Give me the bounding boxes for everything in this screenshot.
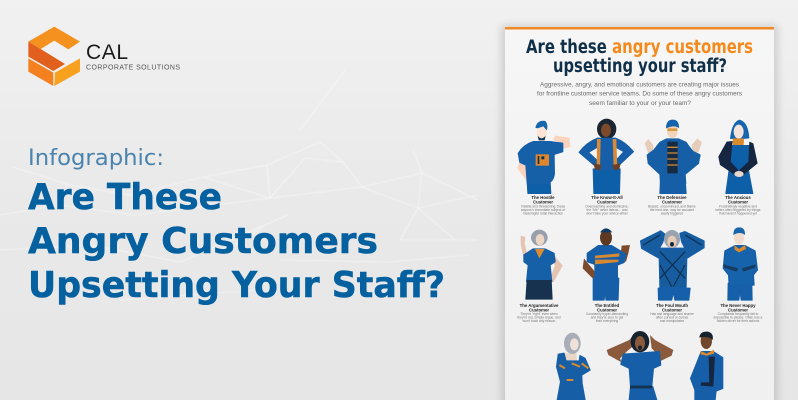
caption: argumentative customer: The Argumentative: [520, 303, 559, 308]
panel top accent: [505, 27, 774, 30]
caption: argumentative customer: [517, 303, 561, 323]
figure: bottom centre customer: [607, 331, 673, 400]
caption: know-it-all customer: won't take your advice either: [586, 212, 629, 216]
panel intro text: Aggressive, angry, and emotional customers are creating major issues: [540, 82, 739, 88]
figure: argumentative customer: [521, 230, 563, 300]
panel intro text: [537, 82, 742, 107]
caption: argumentative customer: Customer: [529, 308, 549, 312]
caption: anxious customer: The Anxious: [725, 195, 751, 200]
caption: hostile customer: Volatile and threatening, these: [521, 204, 565, 208]
caption: foul mouth customer: Has lost language and shame: [650, 312, 694, 316]
panel title: [526, 37, 753, 77]
logo: [28, 27, 180, 86]
caption: hostile customer: Customer: [533, 200, 553, 204]
figure: anxious customer: [718, 120, 758, 193]
caption: argumentative customer: they're not, simply argue, and: [517, 316, 561, 320]
caption: foul mouth customer: Customer: [662, 308, 682, 312]
panel intro text: seem familiar to your or your team?: [589, 100, 692, 107]
caption: foul mouth customer: The Foul Mouth: [656, 303, 688, 308]
panel shadow: [501, 25, 778, 400]
figure: bottom left customer: [557, 333, 590, 400]
caption: defensive customer: Customer: [662, 200, 682, 204]
caption: hostile customer: The Hostile: [531, 195, 555, 200]
caption: know-it-all customer: the "Me" never listens... and: [586, 208, 628, 212]
caption: never happy customer: Complaints frequently fail to: [718, 312, 759, 316]
caption: anxious customer: Customer: [728, 200, 748, 204]
caption: anxious customer: [716, 195, 761, 216]
caption: entitled customer: their everything: [596, 319, 618, 323]
caption: never happy customer: Customer: [728, 308, 748, 312]
panel title: upsetting your staff?: [553, 56, 727, 77]
caption: hostile customer: anyone's immediate subject of: [521, 208, 565, 212]
caption: never happy customer: hidden driver for their actions: [717, 319, 760, 323]
figure: bottom right customer: [691, 332, 723, 400]
caption: know-it-all customer: Overreaching and dismissive,: [585, 204, 629, 208]
caption: anxious customer: better-often triggered by things: [716, 208, 761, 212]
caption: never happy customer: [714, 303, 763, 323]
figure: entitled customer: [583, 228, 630, 300]
caption: know-it-all customer: The Know-It-All: [591, 195, 623, 200]
caption: entitled customer: The Entitled: [595, 303, 620, 308]
caption: entitled customer: Constantly hyper-demanding: [586, 312, 628, 316]
caption: argumentative customer: won't back any reason: [523, 319, 556, 323]
panel title: Are these angry customers: [526, 37, 753, 58]
figure: defensive customer: [645, 120, 702, 193]
caption: entitled customer: and they're sure to get: [591, 316, 623, 320]
figure: know-it-all customer: [579, 119, 633, 193]
figure: foul mouth customer: [641, 230, 704, 300]
headline: [28, 177, 445, 306]
caption: defensive customer: the front-line, may be accused: [650, 208, 694, 212]
headline: Angry Customers: [28, 221, 378, 262]
caption: anxious customer: Frustratingly negative and: [719, 204, 757, 208]
caption: entitled customer: Customer: [597, 308, 617, 312]
caption: never happy customer: impossible to please. Often has a: [714, 316, 763, 320]
caption: defensive customer: Biased, unconvinced, and blame: [648, 204, 696, 208]
panel intro text: for frontline customer service teams. Do some of these angry customers: [537, 90, 742, 98]
caption: defensive customer: The Defensive: [657, 195, 687, 200]
caption: foul mouth customer: and manipulates: [660, 319, 684, 323]
eyebrow: Infographic: Infographic:: [28, 146, 164, 171]
caption: know-it-all customer: [585, 195, 629, 216]
caption: foul mouth customer: [650, 303, 694, 323]
panel: infographic preview: [505, 27, 774, 400]
figure: never happy customer: [723, 227, 757, 300]
logo tagline: CORPORATE SOLUTIONS: [86, 64, 180, 72]
caption: entitled customer: [586, 303, 628, 323]
caption: defensive customer: easily triggered: [661, 212, 683, 216]
caption: defensive customer: [648, 195, 696, 216]
panel sheet: [505, 28, 774, 400]
headline: Upsetting Your Staff?: [28, 265, 445, 306]
caption: hostile customer: meaningful retail interaction: [523, 212, 563, 216]
caption: anxious customer: that haven't happened yet: [719, 212, 757, 216]
logo wordmark: CAL: [86, 41, 128, 64]
logo mark: [28, 27, 80, 86]
figure: hostile customer: [517, 121, 571, 193]
background network pattern: [0, 70, 478, 300]
headline: Are These: [28, 177, 222, 218]
caption: hostile customer: [521, 195, 565, 216]
caption: know-it-all customer: Customer: [597, 200, 617, 204]
caption: foul mouth customer: often cursed or curses: [656, 316, 689, 320]
caption: never happy customer: The Never Happy: [720, 303, 756, 308]
caption: argumentative customer: They're "right" even when: [520, 312, 558, 316]
